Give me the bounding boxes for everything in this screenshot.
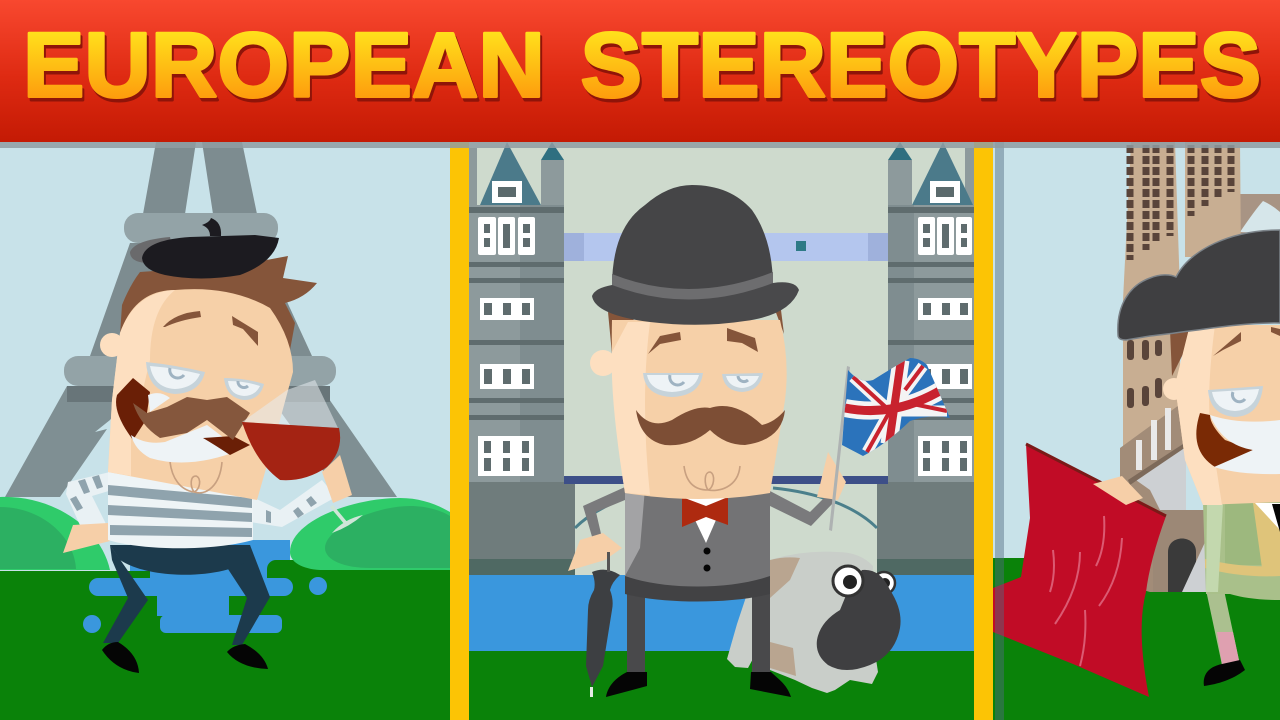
jacket bbox=[1203, 500, 1280, 600]
water bbox=[130, 540, 290, 600]
head bbox=[108, 289, 293, 500]
left arm bbox=[66, 472, 112, 532]
figure: Frenchman bbox=[63, 218, 352, 673]
shoe bbox=[1204, 660, 1245, 686]
icon: Union Jack flag bbox=[829, 350, 955, 531]
mouth bbox=[1196, 413, 1253, 467]
figure: Spanish matador bbox=[1118, 230, 1280, 686]
title shadow: EUROPEAN STEREOTYPES bbox=[25, 18, 1263, 120]
shoes bbox=[606, 672, 791, 697]
right arm bbox=[250, 480, 336, 527]
icon: Tower Bridge bbox=[469, 142, 974, 575]
mouth bbox=[116, 378, 150, 440]
legs bbox=[103, 545, 270, 645]
moustache bbox=[636, 406, 785, 445]
icon: wine glass bbox=[242, 380, 363, 533]
ground bbox=[0, 560, 450, 720]
moustache bbox=[133, 397, 250, 440]
icon: umbrella bbox=[586, 552, 620, 697]
beret bbox=[130, 218, 279, 278]
translucent strip bbox=[995, 142, 1004, 720]
right arm bbox=[770, 491, 834, 526]
pond bbox=[83, 570, 327, 633]
teeth bbox=[1210, 415, 1280, 474]
ear bbox=[590, 350, 616, 376]
ground bbox=[993, 558, 1280, 720]
bow tie bbox=[682, 497, 728, 527]
lower lip bbox=[203, 436, 250, 455]
head bbox=[1175, 325, 1280, 505]
ear bbox=[100, 333, 124, 357]
figure: English gentleman bbox=[568, 185, 846, 697]
icon: pug bbox=[727, 552, 901, 693]
icon: red cape bbox=[993, 444, 1166, 697]
right tower bbox=[877, 142, 974, 575]
ear bbox=[1163, 378, 1185, 400]
legs bbox=[627, 590, 645, 674]
bowler hat bbox=[592, 185, 799, 325]
panel: France bbox=[0, 142, 450, 720]
eyebrows bbox=[1213, 327, 1280, 356]
icon: Sagrada Familia bbox=[1120, 142, 1280, 592]
hat bbox=[1118, 230, 1280, 340]
head bbox=[612, 320, 787, 499]
eyebrows bbox=[648, 328, 758, 354]
shoes bbox=[102, 642, 268, 673]
icon: Eiffel Tower bbox=[5, 142, 397, 497]
hair bbox=[608, 310, 784, 354]
river bbox=[469, 575, 974, 651]
teeth bbox=[131, 393, 240, 462]
ground bbox=[469, 651, 974, 720]
bushes bbox=[0, 497, 450, 570]
yellow pillars bbox=[450, 142, 469, 720]
title: EUROPEAN STEREOTYPES bbox=[23, 14, 1261, 116]
eye bbox=[1208, 386, 1263, 417]
shirt and tie bbox=[1255, 503, 1280, 530]
panel: Spain bbox=[993, 142, 1280, 720]
hair bbox=[1170, 330, 1195, 376]
panel: United Kingdom bbox=[450, 142, 994, 720]
left tower bbox=[469, 142, 575, 575]
title banner bbox=[0, 0, 1280, 148]
shirt bbox=[108, 470, 253, 548]
eyebrows bbox=[163, 311, 258, 346]
eyes bbox=[643, 373, 763, 397]
left arm bbox=[583, 487, 625, 540]
eyes bbox=[146, 362, 264, 400]
hair bbox=[120, 256, 317, 350]
legs bbox=[1206, 590, 1240, 665]
jacket bbox=[625, 488, 770, 586]
